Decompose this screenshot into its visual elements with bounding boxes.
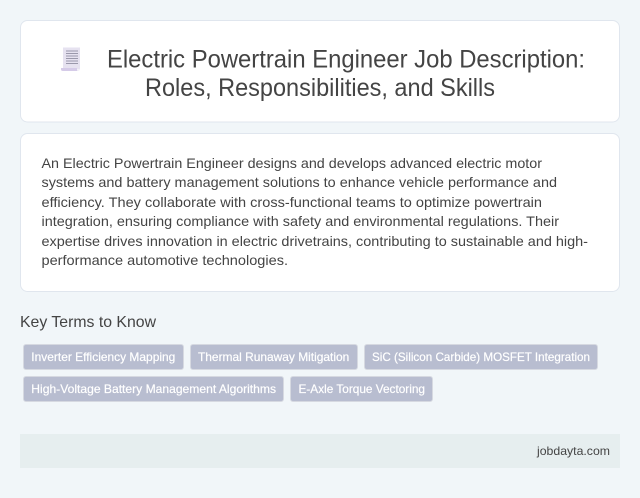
footer bar <box>20 434 620 468</box>
title: Roles, Responsibilities, and Skills <box>145 74 495 102</box>
chip: thermal runaway mitigation <box>190 344 358 370</box>
panel: description card <box>20 134 620 292</box>
title <box>107 46 585 102</box>
chip: high-voltage battery management algorithms: High-Voltage Battery Management Algorithms <box>31 382 276 396</box>
chip: SiC MOSFET integration <box>364 344 598 370</box>
description text <box>42 155 588 268</box>
chip: e-axle torque vectoring: E-Axle Torque Vectoring <box>298 382 425 396</box>
chip: e-axle torque vectoring <box>290 376 432 402</box>
chip: thermal runaway mitigation: Thermal Runaway Mitigation <box>198 350 349 364</box>
description text: efficiency. They collaborate with cross-functional teams to optimize powertrain <box>42 194 542 210</box>
panel: title card <box>20 20 620 122</box>
description text: performance automotive technologies. <box>42 252 288 268</box>
key term chips <box>24 344 598 402</box>
description text: An Electric Powertrain Engineer designs and develops advanced electric motor <box>42 155 542 171</box>
chip: high-voltage battery management algorithms <box>24 376 284 402</box>
description text: expertise drives innovation in electric drivetrains, contributing to sustainable and high- <box>42 233 588 249</box>
description text: integration, ensuring compliance with safety and environmental regulations. Their <box>42 213 559 229</box>
description text: systems and battery management solutions to enhance vehicle performance and <box>42 174 557 190</box>
title: Electric Powertrain Engineer Job Description: <box>107 46 585 74</box>
chip: SiC MOSFET integration: SiC (Silicon Carbide) MOSFET Integration <box>372 350 590 364</box>
heading: key terms: Key Terms to Know <box>20 314 156 331</box>
icon: document scroll <box>61 48 80 71</box>
chip: inverter efficiency mapping: Inverter Efficiency Mapping <box>31 350 175 364</box>
chip: inverter efficiency mapping <box>24 344 184 370</box>
footer source text: jobdayta.com <box>536 444 610 458</box>
